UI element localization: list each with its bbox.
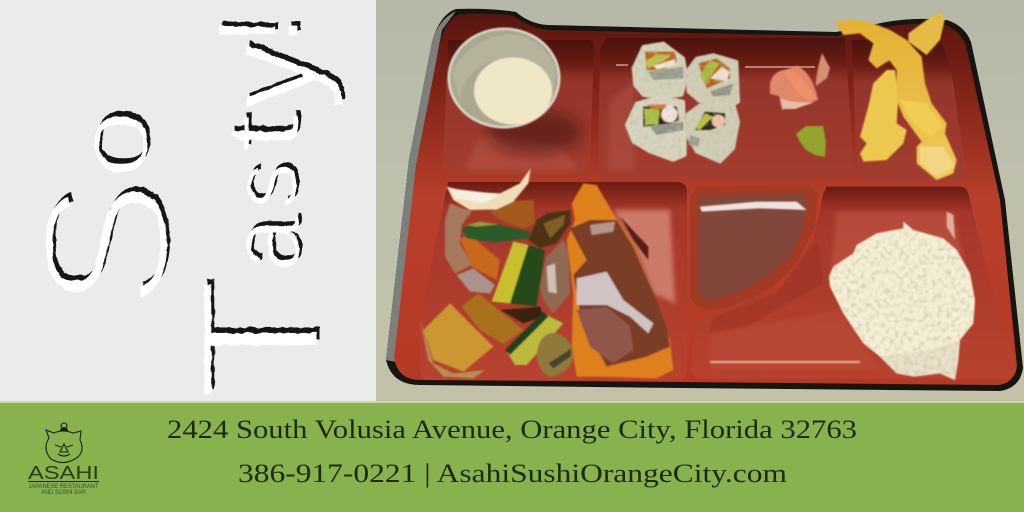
left slogan panel	[0, 0, 376, 402]
slogan line: Tasty!	[166, 12, 358, 399]
shrimp front	[835, 19, 957, 180]
slogan line: Tasty!: T	[166, 273, 358, 399]
shadow under cup	[487, 110, 583, 154]
bright reflection: salmon cell	[613, 210, 675, 303]
logo: Asahi cat: AND SUSHI BAR	[41, 490, 87, 496]
footer band	[0, 402, 1024, 512]
slogan line: So: S	[8, 176, 209, 308]
tofu	[423, 303, 493, 372]
tray black edge	[386, 9, 1023, 391]
shrimp tempura	[835, 12, 957, 180]
roll top right	[687, 55, 738, 108]
shrimp back	[908, 12, 945, 55]
zucchini long	[462, 222, 530, 243]
onion left	[445, 203, 472, 273]
compartment: sushi cell	[598, 38, 854, 180]
mushroom bottom	[537, 333, 573, 377]
compartment: sauce cup cell	[443, 40, 594, 175]
icon: cat face	[46, 423, 82, 463]
compartment: tempura cell	[852, 40, 967, 182]
photo: bento tray on steel counter	[376, 0, 1024, 402]
roll bottom left	[627, 97, 685, 160]
zucchini big	[510, 245, 545, 307]
logo tagline: JAPANESE RESTAURANT	[28, 484, 99, 490]
wasabi	[796, 126, 826, 157]
steel counter background	[376, 0, 1024, 402]
roll bottom right	[687, 103, 738, 162]
carrot	[460, 235, 500, 280]
slogan line: Tasty!: !	[195, 12, 325, 44]
compartment: sauce dish	[690, 185, 818, 310]
mushroom top	[528, 210, 571, 248]
browned piece	[490, 200, 535, 228]
pickled ginger	[770, 53, 830, 110]
phone and website line: 386-917-0221 | AsahiSushiOrangeCity.com	[238, 459, 787, 488]
logo: Asahi cat	[28, 423, 99, 496]
dark gap	[500, 307, 543, 323]
onion lower	[457, 268, 495, 293]
onion top	[447, 168, 531, 210]
vegetables	[420, 168, 573, 378]
cream sauce cup	[448, 28, 560, 128]
slogan line: Tasty!: t	[206, 111, 323, 150]
onion right	[540, 240, 570, 313]
slogan line: Tasty!: a	[211, 214, 323, 270]
slogan line: Tasty!: s	[213, 160, 318, 207]
slogan line: So: o	[59, 106, 170, 176]
slogan line: Tasty!: y	[198, 40, 346, 107]
compartment: rice cell	[692, 187, 1017, 378]
sushi rolls	[627, 43, 738, 162]
reflections: top cells	[466, 80, 635, 170]
roll top left	[633, 43, 687, 98]
tray red rim	[394, 13, 1017, 385]
steamed rice	[829, 222, 975, 380]
address line: 2424 South Volusia Avenue, Orange City, Florida 32763	[167, 415, 857, 444]
salmon with teriyaki sauce	[567, 183, 673, 378]
logo wordmark: ASAHI	[28, 463, 99, 483]
lower onion	[420, 320, 485, 378]
compartment: vegetable and salmon cell	[420, 182, 687, 380]
zucchini small	[507, 315, 563, 365]
slogan line: So	[8, 106, 209, 308]
